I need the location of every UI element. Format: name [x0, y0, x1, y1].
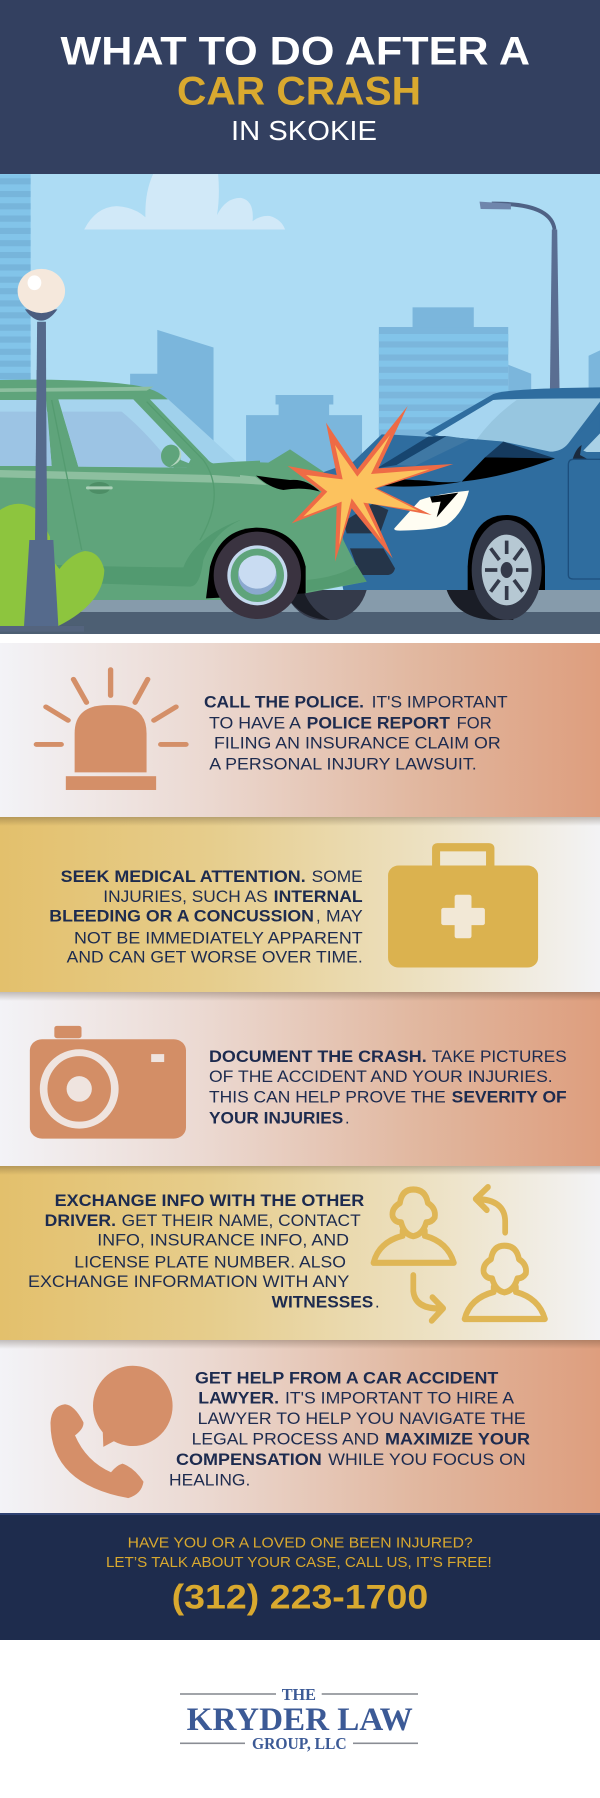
text: get help from a lawyer: LAWYER. — [198, 1390, 279, 1408]
logo: The Kryder Law Group: THE — [282, 1685, 316, 1704]
skyline buildings — [130, 307, 600, 475]
text: document the crash: . — [345, 1109, 350, 1127]
text: seek medical attention: AND CAN GET WORSE OVER TIME. — [67, 949, 363, 967]
right street lamp — [480, 202, 560, 389]
headlight — [394, 491, 469, 531]
logo: The Kryder Law Group — [180, 1685, 418, 1753]
text: get help from a lawyer — [169, 1369, 530, 1489]
header band — [0, 0, 600, 174]
cloud — [84, 174, 285, 229]
text: seek medical attention: INTERNAL — [274, 888, 363, 906]
text: get help from a lawyer: WHILE YOU FOCUS ON — [328, 1451, 526, 1469]
panel: exchange info — [0, 1166, 600, 1340]
text: document the crash: OF THE ACCIDENT AND YOUR INJURIES. — [209, 1068, 553, 1086]
text: call the police: TO HAVE A — [209, 715, 301, 733]
text: seek medical attention — [49, 868, 363, 967]
text: exchange info: GET THEIR NAME, CONTACT — [122, 1212, 361, 1230]
road — [0, 590, 600, 634]
text: exchange info: DRIVER. — [45, 1212, 116, 1230]
text: exchange info — [28, 1192, 380, 1311]
blue car body — [320, 387, 600, 620]
grille — [343, 503, 388, 533]
panel: document the crash — [0, 992, 600, 1166]
text: document the crash — [209, 1048, 567, 1127]
phone number: (312) 223-1700 — [172, 1578, 428, 1616]
text: document the crash: TAKE PICTURES — [432, 1048, 567, 1066]
back tyres — [283, 590, 513, 620]
panel: get help from a lawyer — [0, 1340, 600, 1513]
text: call the police: POLICE REPORT — [307, 715, 450, 733]
title highlight: CAR CRASH — [177, 70, 421, 114]
text: get help from a lawyer: GET HELP FROM A CAR ACCIDENT — [195, 1369, 498, 1387]
text: exchange info: EXCHANGE INFORMATION WITH ANY — [28, 1273, 349, 1291]
text: seek medical attention: SEEK MEDICAL ATTENTION. — [61, 868, 306, 886]
cta text: HAVE YOU OR A LOVED ONE BEEN INJURED? — [128, 1535, 473, 1552]
text: get help from a lawyer: COMPENSATION — [176, 1451, 322, 1469]
icon: phone with speech bubble — [51, 1366, 173, 1498]
title line: WHAT TO DO AFTER A — [60, 30, 530, 74]
left street lamp — [0, 269, 84, 632]
illustration: car crash street scene — [0, 174, 600, 634]
text: get help from a lawyer: LEGAL PROCESS AND — [192, 1431, 379, 1449]
subtitle: IN SKOKIE — [231, 115, 377, 146]
text: seek medical attention: INJURIES, SUCH AS — [103, 888, 268, 906]
bushes — [0, 504, 104, 626]
left building — [0, 174, 31, 387]
icon: first aid kit — [388, 843, 538, 968]
door handle — [89, 482, 110, 494]
text: call the police: CALL THE POLICE. — [204, 694, 364, 712]
text: exchange info: WITNESSES — [272, 1293, 373, 1311]
text: get help from a lawyer: LAWYER TO HELP YOU NAVIGATE THE — [198, 1410, 526, 1428]
text: call the police: FOR — [457, 715, 492, 733]
explosion — [288, 406, 453, 562]
panel: call the police — [0, 643, 600, 817]
text: exchange info: EXCHANGE INFO WITH THE OTHER — [55, 1192, 364, 1210]
text: seek medical attention: , — [316, 908, 321, 926]
logo: The Kryder Law Group: GROUP, LLC — [252, 1734, 347, 1753]
icon: two people exchanging — [374, 1187, 545, 1321]
call to action band: LET’S TALK ABOUT YOUR CASE, CALL US, IT’S FREE! — [106, 1554, 492, 1571]
text: exchange info: LICENSE PLATE NUMBER. ALSO — [74, 1253, 346, 1271]
text: document the crash: YOUR INJURIES — [209, 1109, 343, 1127]
text: get help from a lawyer: IT'S IMPORTANT TO HIRE A — [285, 1390, 514, 1408]
text: seek medical attention: NOT BE IMMEDIATELY APPARENT — [74, 929, 363, 947]
text: seek medical attention: BLEEDING OR A CONCUSSION — [49, 908, 314, 926]
panel: seek medical attention — [0, 817, 600, 992]
text: call the police: IT'S IMPORTANT — [372, 694, 508, 712]
blue car and crash detail — [283, 387, 600, 620]
text: call the police — [204, 694, 508, 773]
green car rear and door — [0, 380, 260, 600]
text: get help from a lawyer: MAXIMIZE YOUR — [385, 1431, 530, 1449]
text: exchange info: . — [375, 1293, 380, 1311]
text: document the crash: DOCUMENT THE CRASH. — [209, 1048, 427, 1066]
icon: camera — [30, 1026, 186, 1139]
icon: siren — [36, 670, 186, 790]
text: exchange info: INFO, INSURANCE INFO, AND — [97, 1232, 349, 1250]
logo: The Kryder Law Group: KRYDER LAW — [187, 1702, 413, 1738]
text: seek medical attention: MAY — [326, 908, 363, 926]
text: get help from a lawyer: HEALING. — [169, 1471, 250, 1489]
text: document the crash: SEVERITY OF — [452, 1089, 567, 1107]
call to action band — [0, 1513, 600, 1640]
mirror — [173, 460, 189, 468]
blue car wheel — [468, 515, 545, 590]
text: call the police: A PERSONAL INJURY LAWSUIT. — [209, 755, 477, 773]
green car front and wheel — [206, 449, 367, 619]
text: document the crash: THIS CAN HELP PROVE THE — [209, 1089, 446, 1107]
green car wheel — [206, 528, 306, 598]
text: call the police: FILING AN INSURANCE CLAIM OR — [214, 735, 501, 753]
text: seek medical attention: SOME — [312, 868, 363, 886]
